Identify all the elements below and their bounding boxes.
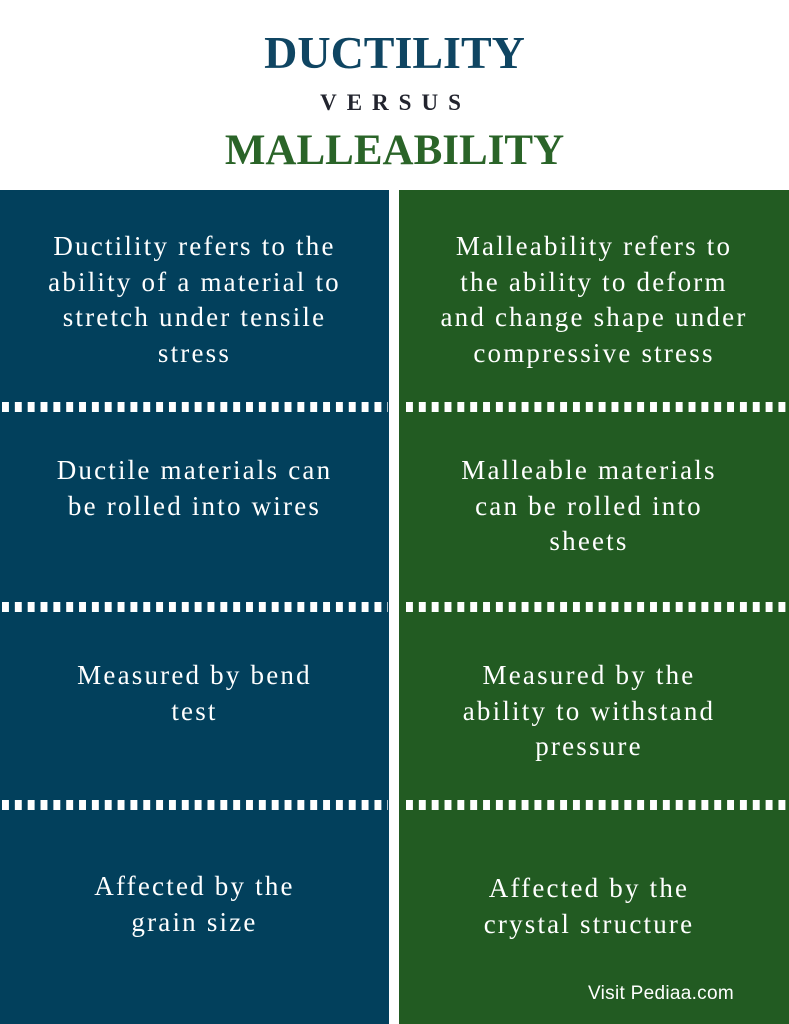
- text: sheets: sheets: [549, 526, 629, 556]
- text: grain size: [94, 871, 295, 937]
- text: measurement: [77, 660, 312, 726]
- text: grain size: Affected by the: [94, 871, 295, 901]
- panel: ductility column: [0, 190, 389, 1024]
- versus: VERSUS: [320, 90, 471, 115]
- text: measurement: pressure: [535, 731, 643, 761]
- text: definition: Malleability refers to: [456, 231, 732, 261]
- text: definition: ability of a material to: [48, 266, 341, 296]
- panel: malleability column: [399, 190, 789, 1024]
- text: definition: [440, 231, 748, 368]
- text: sheets: [461, 455, 717, 556]
- footer: source: Visit Pediaa.com: [588, 983, 734, 1004]
- text: grain size: grain size: [131, 906, 258, 936]
- text: sheets: can be rolled into: [475, 490, 703, 520]
- text: definition: and change shape under: [440, 302, 748, 332]
- text: definition: compressive stress: [473, 338, 715, 368]
- text: measurement: [463, 660, 715, 761]
- text: wires: Ductile materials can: [57, 455, 332, 485]
- text: measurement: test: [171, 696, 218, 726]
- text: definition: the ability to deform: [460, 266, 728, 296]
- text: measurement: ability to withstand: [463, 696, 715, 726]
- heading: malleability: MALLEABILITY: [225, 127, 564, 174]
- text: definition: [48, 231, 341, 368]
- text: measurement: Measured by the: [483, 660, 695, 690]
- text: sheets: Malleable materials: [461, 455, 717, 485]
- text: definition: Ductility refers to the: [53, 231, 336, 261]
- text: wires: be rolled into wires: [68, 490, 321, 520]
- text: crystal structure: crystal structure: [484, 908, 694, 938]
- text: measurement: Measured by bend: [77, 660, 312, 690]
- text: definition: stretch under tensile: [63, 302, 326, 332]
- text: crystal structure: Affected by the: [489, 873, 689, 903]
- text: wires: [57, 455, 332, 520]
- text: definition: stress: [158, 338, 231, 368]
- title: [225, 27, 564, 174]
- text: crystal structure: [484, 873, 694, 939]
- heading: ductility: DUCTILITY: [264, 27, 525, 78]
